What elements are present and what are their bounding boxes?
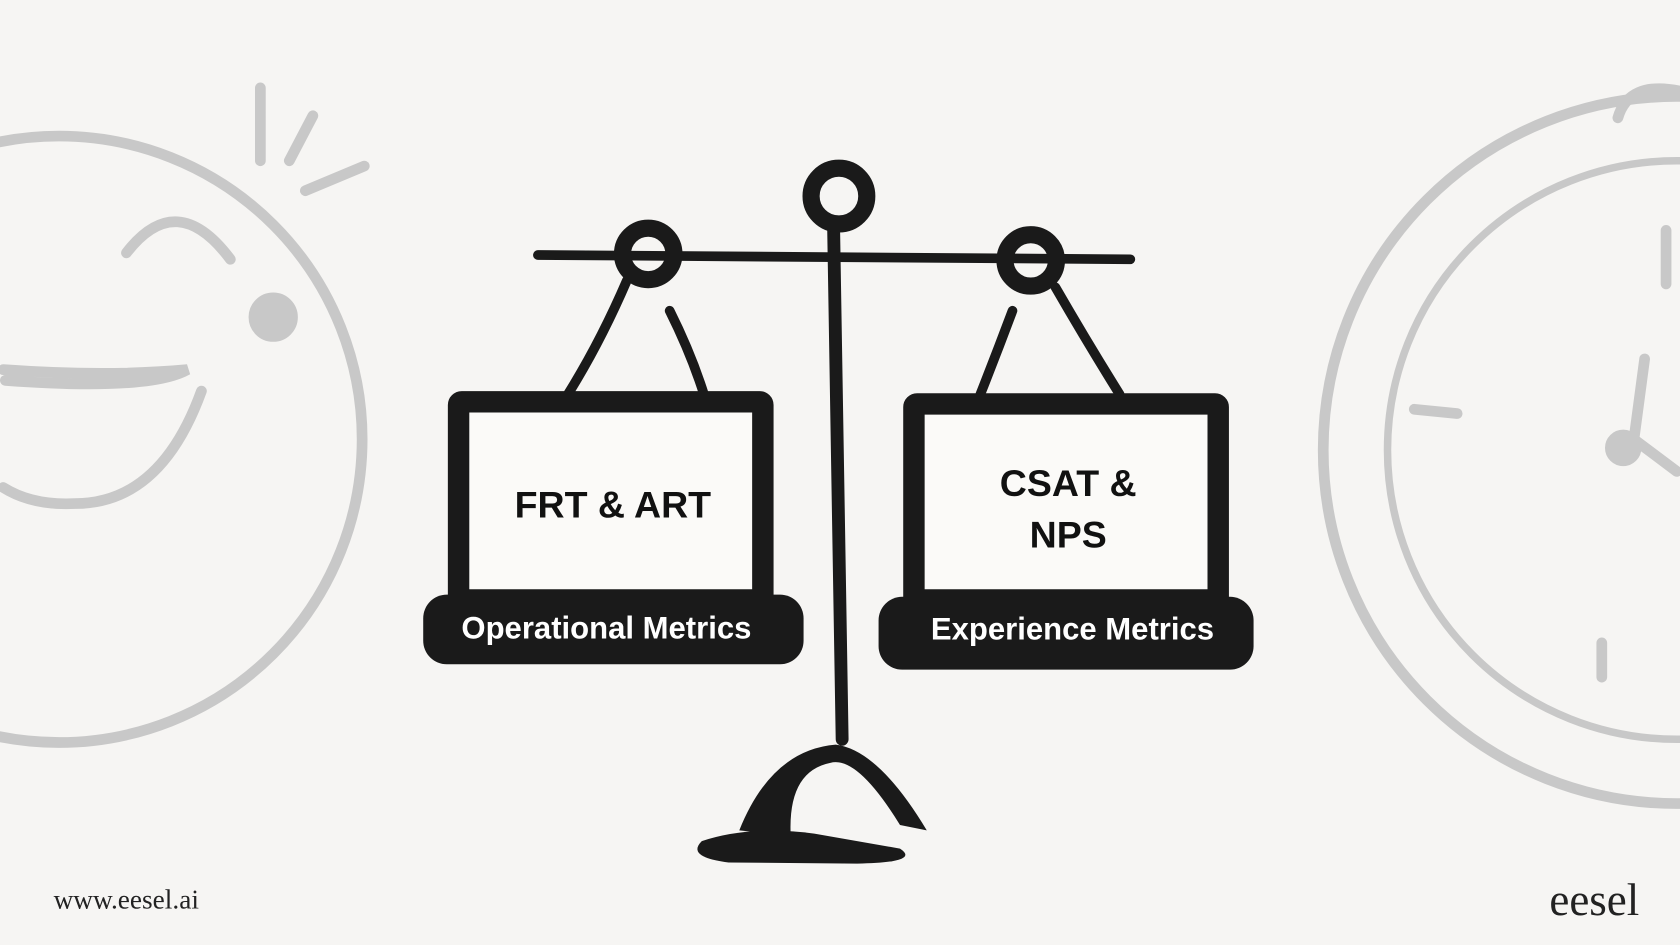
panel: experience metrics: Experience Metrics xyxy=(931,612,1214,647)
hangers xyxy=(568,281,1120,394)
icon: stopwatch xyxy=(1323,89,1680,804)
label pill xyxy=(423,595,804,664)
balance scale xyxy=(538,168,1130,864)
base xyxy=(739,745,927,836)
right ring xyxy=(1005,235,1056,286)
label pill xyxy=(879,597,1254,670)
footer url: www.eesel.ai xyxy=(54,885,199,915)
panel: operational metrics xyxy=(423,402,804,664)
logo: eesel: eesel xyxy=(1549,875,1639,925)
panel: operational metrics: Operational Metrics xyxy=(461,611,751,646)
text: CSAT & NPS: CSAT & xyxy=(1000,462,1137,504)
icon: smiley face xyxy=(0,88,364,743)
top ring xyxy=(811,168,867,224)
beam xyxy=(538,255,1130,259)
panel: experience metrics: NPS xyxy=(1030,513,1107,555)
panel: experience metrics xyxy=(879,404,1254,670)
center post xyxy=(834,225,842,739)
left ring xyxy=(622,228,674,280)
text: FRT & ART: FRT & ART xyxy=(515,483,711,525)
